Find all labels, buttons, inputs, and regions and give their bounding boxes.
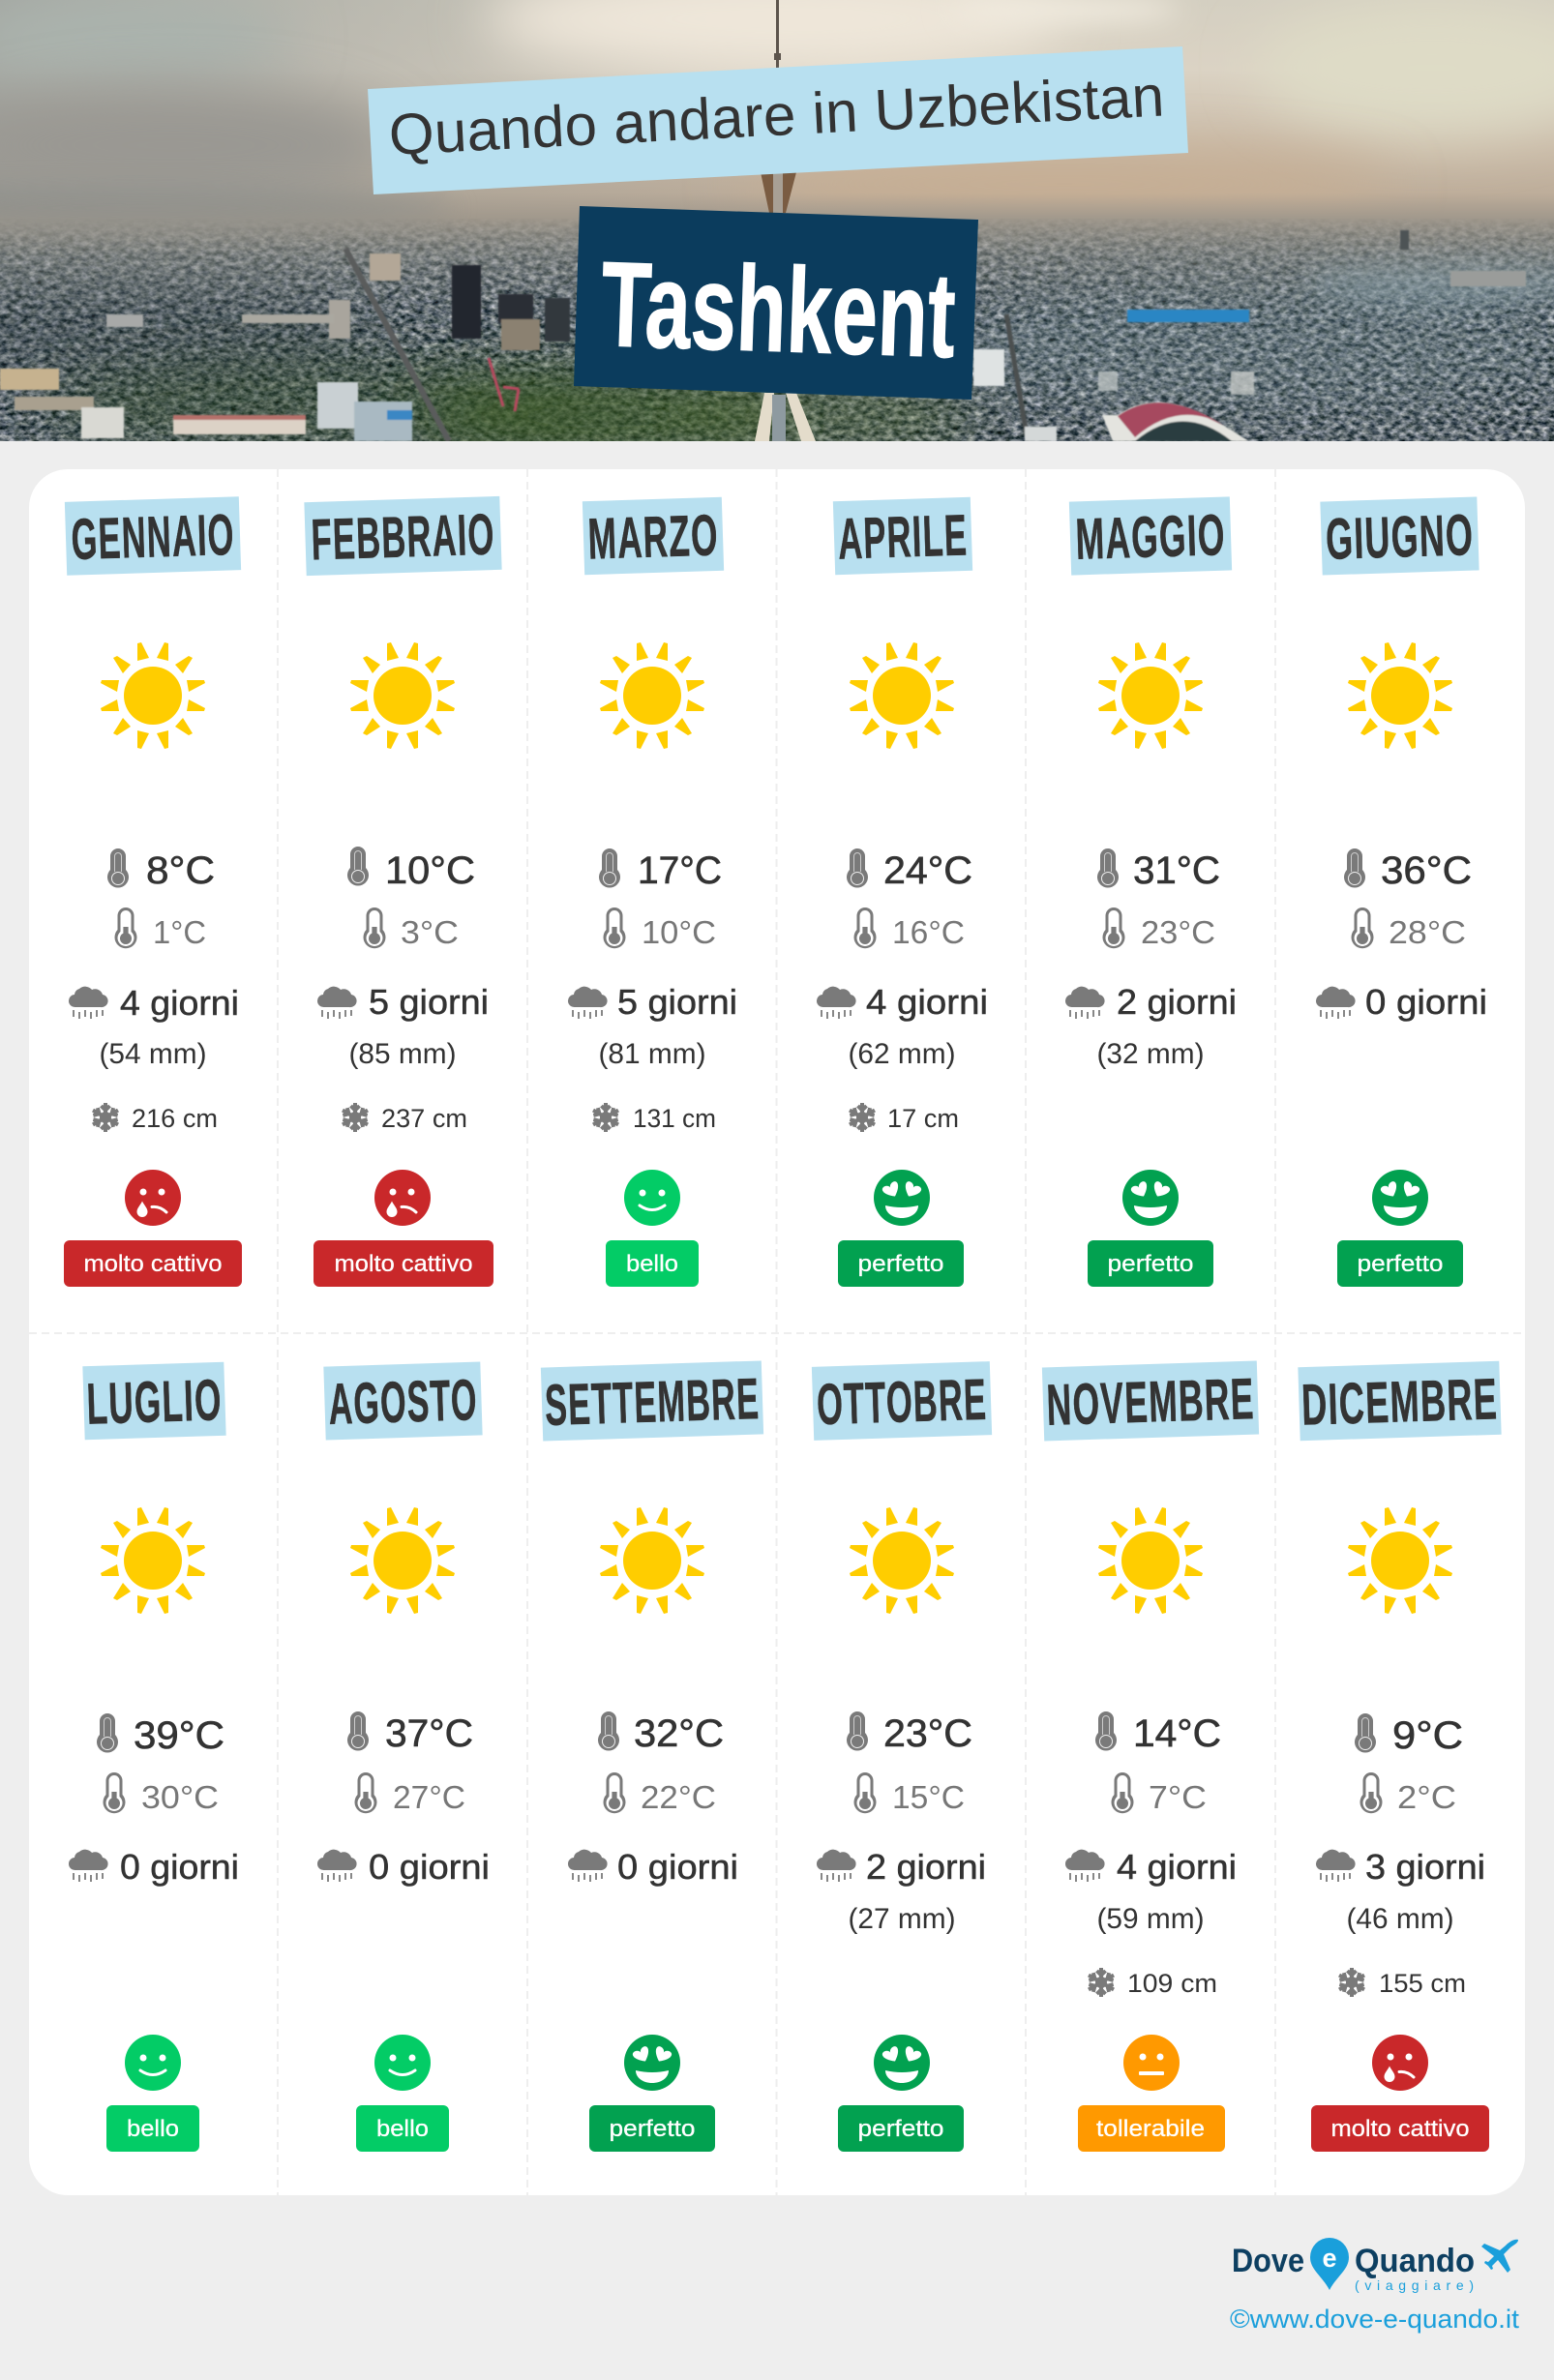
max temperature <box>1095 1711 1221 1755</box>
icon: rating face <box>125 2035 181 2091</box>
max temperature <box>1097 848 1220 892</box>
rating badge <box>106 2105 199 2152</box>
rainy days: 2 giorni <box>1117 982 1237 1022</box>
panel: ottobre <box>812 1361 992 2152</box>
panel: novembre <box>1042 1361 1259 2152</box>
max temperature: 14°C <box>1133 1712 1221 1755</box>
month label <box>304 496 502 576</box>
rating badge: perfetto <box>1357 1251 1444 1277</box>
rating badge <box>838 2105 964 2152</box>
panel: luglio <box>69 1362 239 2152</box>
min temperature <box>354 1772 465 1815</box>
min temperature: 15°C <box>892 1779 965 1815</box>
min temperature: 27°C <box>393 1779 465 1815</box>
max temperature: 9°C <box>1392 1714 1463 1757</box>
rainy days <box>817 1847 986 1887</box>
snowfall <box>848 1103 959 1133</box>
rainy days <box>1316 1847 1485 1887</box>
month label: MARZO <box>587 502 720 572</box>
month label <box>583 497 724 575</box>
max temperature: 10°C <box>385 849 475 892</box>
rainy days: 5 giorni <box>369 982 489 1022</box>
min temperature <box>1351 907 1466 950</box>
rainy days: 4 giorni <box>866 982 988 1022</box>
icon: rating face <box>1372 1170 1428 1226</box>
icon: rating face <box>374 1170 431 1226</box>
snowfall: 17 cm <box>887 1104 959 1133</box>
month label <box>65 496 241 576</box>
footer logo <box>1232 2238 1518 2293</box>
snowfall <box>1337 1968 1466 1998</box>
icon: sun <box>600 642 704 749</box>
min temperature <box>853 907 965 950</box>
rainy days <box>1065 982 1237 1022</box>
TV tower <box>755 0 816 441</box>
icon: sun <box>1348 642 1452 749</box>
min temperature: 30°C <box>141 1779 219 1815</box>
icon: rating face <box>1372 2035 1428 2091</box>
header photo: Tashkent skyline <box>0 0 1554 460</box>
min temperature: 10°C <box>642 914 716 950</box>
rainy days <box>568 982 737 1022</box>
icon: sun <box>1098 1507 1203 1614</box>
rating badge <box>1088 1240 1213 1287</box>
max temperature <box>847 1711 972 1755</box>
rainy days <box>317 1847 490 1887</box>
rainy days <box>817 982 988 1022</box>
icon: sun <box>850 1507 954 1614</box>
rating badge <box>589 2105 715 2152</box>
rating badge: molto cattivo <box>1331 2116 1469 2142</box>
title banner: Tashkent <box>599 237 958 383</box>
title banner <box>574 206 978 400</box>
max temperature: 23°C <box>883 1712 972 1755</box>
footer logo: Quando <box>1355 2243 1475 2279</box>
rainy days: 4 giorni <box>120 983 239 1023</box>
min temperature <box>1360 1772 1456 1815</box>
month label <box>541 1360 763 1442</box>
icon: rating face <box>125 1170 181 1226</box>
icon: sun <box>350 1507 455 1614</box>
min temperature: 1°C <box>153 914 206 950</box>
rainfall: (27 mm) <box>848 1903 956 1935</box>
max temperature: 24°C <box>883 849 972 892</box>
rating badge: tollerabile <box>1096 2116 1205 2142</box>
max temperature <box>347 847 475 892</box>
month label <box>1042 1361 1259 1441</box>
month label <box>1069 496 1232 576</box>
month label <box>82 1362 226 1440</box>
icon: rating face <box>624 2035 680 2091</box>
panel: giugno <box>1316 496 1487 1287</box>
month label <box>833 497 972 575</box>
rainfall: (81 mm) <box>598 1038 706 1070</box>
max temperature: 8°C <box>146 849 215 892</box>
subtitle banner: Quando andare in Uzbekistan <box>387 63 1166 167</box>
rainy days: 5 giorni <box>617 982 737 1022</box>
min temperature <box>604 907 716 950</box>
icon: sun <box>1348 1507 1452 1614</box>
month label <box>812 1361 992 1441</box>
max temperature: 37°C <box>385 1712 473 1755</box>
min temperature: 2°C <box>1397 1779 1456 1815</box>
rainy days: 3 giorni <box>1365 1847 1485 1887</box>
panel: agosto <box>317 1361 490 2152</box>
rating badge: perfetto <box>1107 1251 1194 1277</box>
icon: sun <box>350 642 455 749</box>
max temperature <box>107 848 215 892</box>
month label: AGOSTO <box>328 1367 479 1437</box>
snowfall: 131 cm <box>633 1104 716 1133</box>
max temperature: 39°C <box>134 1714 224 1757</box>
max temperature <box>847 848 972 892</box>
rating badge: bello <box>127 2116 179 2142</box>
max temperature <box>599 848 722 892</box>
min temperature <box>1111 1772 1207 1815</box>
month label: OTTOBRE <box>816 1367 988 1437</box>
icon: map pin <box>1310 2238 1349 2290</box>
website credit: ©www.dove-e-quando.it <box>1230 2305 1520 2334</box>
max temperature: 36°C <box>1381 849 1472 892</box>
month label <box>1320 496 1479 576</box>
min temperature <box>103 1772 219 1815</box>
min temperature: 22°C <box>641 1779 716 1815</box>
rainfall: (32 mm) <box>1097 1038 1204 1070</box>
rainfall: (62 mm) <box>848 1038 956 1070</box>
rating badge <box>838 1240 964 1287</box>
month label: GENNAIO <box>71 502 236 572</box>
rainy days <box>69 983 239 1023</box>
max temperature: 31°C <box>1133 849 1220 892</box>
rating badge: bello <box>626 1251 678 1277</box>
rainy days: 4 giorni <box>1117 1847 1237 1887</box>
snowfall <box>341 1103 467 1133</box>
snowfall: 109 cm <box>1127 1969 1217 1998</box>
icon: sun <box>850 642 954 749</box>
snowfall <box>591 1103 716 1133</box>
rating badge: molto cattivo <box>335 1251 472 1277</box>
panel: febbraio <box>304 496 502 1287</box>
icon: sun <box>101 642 205 749</box>
panel: settembre <box>541 1360 763 2152</box>
max temperature <box>598 1711 724 1755</box>
subtitle banner <box>368 46 1188 194</box>
icon: rating face <box>1122 1170 1179 1226</box>
min temperature: 3°C <box>401 914 459 950</box>
rainy days: 2 giorni <box>866 1847 986 1887</box>
snowfall <box>91 1103 218 1133</box>
rating badge: perfetto <box>857 1251 944 1277</box>
max temperature: 32°C <box>634 1712 724 1755</box>
rainy days <box>1065 1847 1237 1887</box>
icon: sun <box>1098 642 1203 749</box>
rainy days <box>1316 982 1487 1022</box>
rainy days <box>317 982 489 1022</box>
rainy days: 0 giorni <box>1365 982 1487 1022</box>
rainfall: (85 mm) <box>348 1038 457 1070</box>
rainfall: (59 mm) <box>1097 1903 1204 1935</box>
max temperature <box>1344 848 1472 892</box>
rating badge <box>606 1240 699 1287</box>
panel: dicembre <box>1298 1361 1502 2152</box>
max temperature: 17°C <box>638 849 722 892</box>
panel: gennaio <box>64 496 242 1287</box>
min temperature <box>853 1772 965 1815</box>
snowfall: 237 cm <box>381 1104 467 1133</box>
rating badge <box>64 1240 242 1287</box>
month label: FEBBRAIO <box>311 502 496 572</box>
month label: APRILE <box>837 502 969 572</box>
rating badge <box>1311 2105 1489 2152</box>
min temperature <box>114 907 206 950</box>
icon: sun <box>600 1507 704 1614</box>
rating badge: molto cattivo <box>83 1251 223 1277</box>
icon: rating face <box>1123 2035 1180 2091</box>
panel: aprile <box>817 497 988 1287</box>
rainy days: 0 giorni <box>617 1847 738 1887</box>
panel: second row of months <box>69 1360 1502 2152</box>
rainfall: (54 mm) <box>99 1038 207 1070</box>
rating badge: perfetto <box>610 2116 695 2142</box>
icon: sun <box>101 1507 205 1614</box>
min temperature <box>604 1772 716 1815</box>
icon: airplane <box>1481 2240 1518 2273</box>
min temperature: 16°C <box>892 914 965 950</box>
footer logo: (viaggiare) <box>1355 2277 1474 2293</box>
rating badge: perfetto <box>857 2116 944 2142</box>
min temperature: 7°C <box>1149 1779 1207 1815</box>
rainy days <box>568 1847 738 1887</box>
panel: marzo <box>568 497 737 1287</box>
min temperature <box>364 907 459 950</box>
rating badge <box>356 2105 449 2152</box>
main card <box>29 469 1525 2195</box>
icon: rating face <box>374 2035 431 2091</box>
icon: map pin: e <box>1322 2244 1337 2273</box>
rating badge <box>314 1240 493 1287</box>
snowfall <box>1087 1968 1217 1998</box>
month label: SETTEMBRE <box>544 1366 761 1438</box>
snowfall: 216 cm <box>132 1104 218 1133</box>
max temperature <box>1355 1713 1463 1757</box>
rainy days: 0 giorni <box>120 1847 239 1887</box>
rainfall: (46 mm) <box>1347 1903 1453 1935</box>
rating badge <box>1078 2105 1225 2152</box>
max temperature <box>97 1713 224 1757</box>
icon: rating face <box>874 1170 930 1226</box>
rating badge: bello <box>376 2116 429 2142</box>
month label: MAGGIO <box>1075 502 1227 572</box>
min temperature: 23°C <box>1141 914 1215 950</box>
footer logo: Dove <box>1232 2243 1304 2279</box>
rainy days <box>69 1847 239 1887</box>
month label: NOVEMBRE <box>1046 1366 1256 1438</box>
panel: maggio <box>1065 496 1237 1287</box>
month label: LUGLIO <box>86 1367 224 1437</box>
min temperature: 28°C <box>1389 914 1466 950</box>
icon: rating face <box>624 1170 680 1226</box>
icon: rating face <box>874 2035 930 2091</box>
min temperature <box>1103 907 1215 950</box>
rainy days: 0 giorni <box>369 1847 490 1887</box>
snowfall: 155 cm <box>1379 1969 1466 1998</box>
max temperature <box>347 1711 473 1755</box>
rating badge <box>1337 1240 1463 1287</box>
month label <box>323 1361 483 1441</box>
